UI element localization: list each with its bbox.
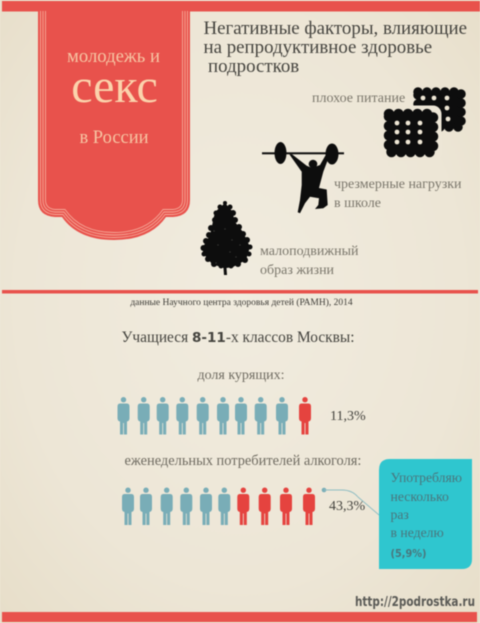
callout: several times a week: раз xyxy=(390,507,409,522)
source note: данные Научного центра здоровья детей (РАМН), 2014 xyxy=(130,297,353,308)
heading: negative factors xyxy=(204,18,467,77)
value: 11.3%: 11,3% xyxy=(330,409,366,424)
factor label: excessive school load xyxy=(334,177,462,211)
heading: negative factors: подростков xyxy=(208,56,299,77)
pictogram: alcohol 4 of 10 xyxy=(122,488,315,525)
callout: several times a week: в неделю xyxy=(390,525,444,540)
middle red divider xyxy=(2,290,478,294)
factor label: excessive school load: чрезмерные нагрузки xyxy=(334,177,462,192)
bottom red bar xyxy=(2,612,477,622)
banner line: youth and: молодежь и xyxy=(67,46,160,67)
callout: several times a week: Употребляю xyxy=(390,470,462,485)
callout connector xyxy=(322,488,379,515)
callout: several times a week: несколько xyxy=(390,489,449,504)
callout: several times a week: (5,9%) xyxy=(390,547,426,560)
banner word: sex: секс xyxy=(71,60,158,113)
value: 43.3%: 43,3% xyxy=(329,499,366,514)
factor label: poor nutrition: плохое питание xyxy=(312,91,405,106)
factor label: sedentary lifestyle: образ жизни xyxy=(260,263,335,278)
icon: weightlifter xyxy=(262,142,344,213)
heading: negative factors: на репродуктивное здоровье xyxy=(204,37,432,58)
factor label: excessive school load: в школе xyxy=(334,196,381,211)
pictogram: smokers 1 of 10 xyxy=(118,397,311,434)
banner line: in Russia: в России xyxy=(79,128,149,148)
label: weekly alcohol consumers: еженедельных потребителей алкоголя: xyxy=(124,453,361,469)
icon: cookies xyxy=(389,92,461,152)
factor label: sedentary lifestyle: малоподвижный xyxy=(260,244,359,259)
icon: fir tree xyxy=(200,201,252,275)
section heading: Moscow students: Учащиеся 8-11-х классов Москвы: xyxy=(122,329,355,346)
callout: several times a week xyxy=(379,459,472,569)
label: share of smokers: доля курящих: xyxy=(197,368,285,383)
banner: title ribbon xyxy=(38,11,190,240)
factor label: sedentary lifestyle xyxy=(260,244,359,278)
heading: negative factors: Негативные факторы, влияющие xyxy=(204,18,467,39)
top red bar xyxy=(2,1,480,12)
